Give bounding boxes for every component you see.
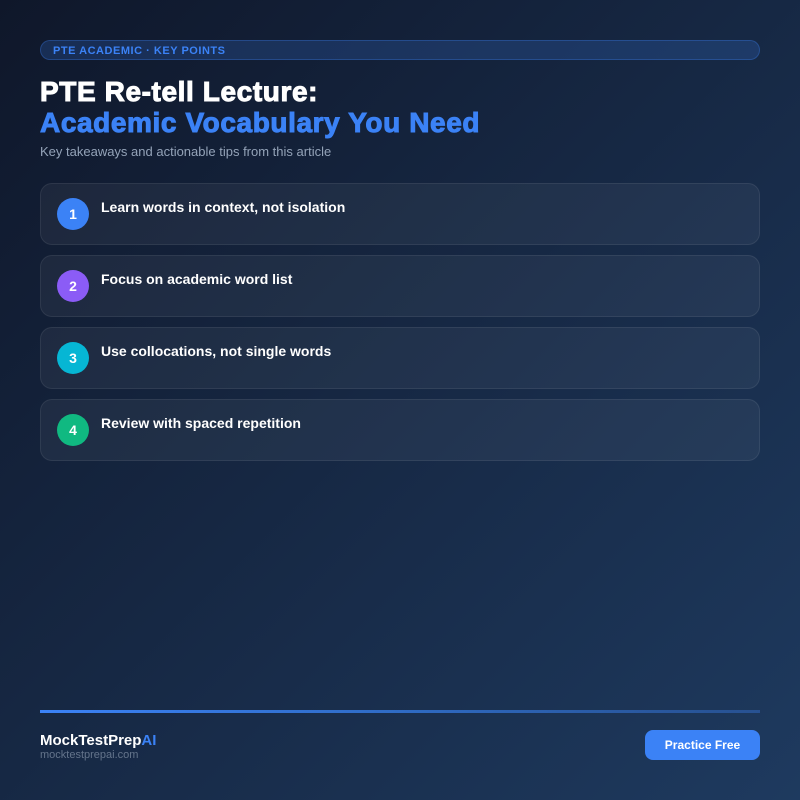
button: practice free bbox=[645, 730, 760, 760]
subtitle: Key takeaways and actionable tips from this article bbox=[40, 144, 331, 159]
text: point 4: Review with spaced repetition bbox=[101, 415, 301, 431]
icon: number 2: 2 bbox=[69, 278, 77, 294]
icon: number 4: 4 bbox=[69, 422, 77, 438]
button: practice free: Practice Free bbox=[665, 738, 740, 752]
text: point 3: Use collocations, not single words bbox=[101, 343, 331, 359]
title bbox=[40, 76, 480, 138]
footer accent line bbox=[40, 710, 760, 713]
brand name: MockTestPrepAI bbox=[40, 732, 156, 749]
brand url: mocktestprepai.com bbox=[40, 749, 138, 761]
title: Academic Vocabulary You Need bbox=[40, 107, 480, 138]
panel: key point 2 bbox=[40, 255, 760, 317]
icon: number 1: 1 bbox=[69, 206, 77, 222]
icon: number 2 bbox=[57, 270, 89, 302]
text: point 2: Focus on academic word list bbox=[101, 271, 292, 287]
title: PTE Re-tell Lecture: bbox=[40, 76, 318, 107]
icon: number 3 bbox=[57, 342, 89, 374]
panel: key point 4 bbox=[40, 399, 760, 461]
tag pill bbox=[40, 40, 760, 60]
icon: number 3: 3 bbox=[69, 350, 77, 366]
panel: key point 1 bbox=[40, 183, 760, 245]
icon: number 1 bbox=[57, 198, 89, 230]
icon: number 4 bbox=[57, 414, 89, 446]
text: point 1: Learn words in context, not isolation bbox=[101, 199, 345, 215]
panel: key point 3 bbox=[40, 327, 760, 389]
tag pill: PTE ACADEMIC · KEY POINTS bbox=[53, 45, 226, 57]
